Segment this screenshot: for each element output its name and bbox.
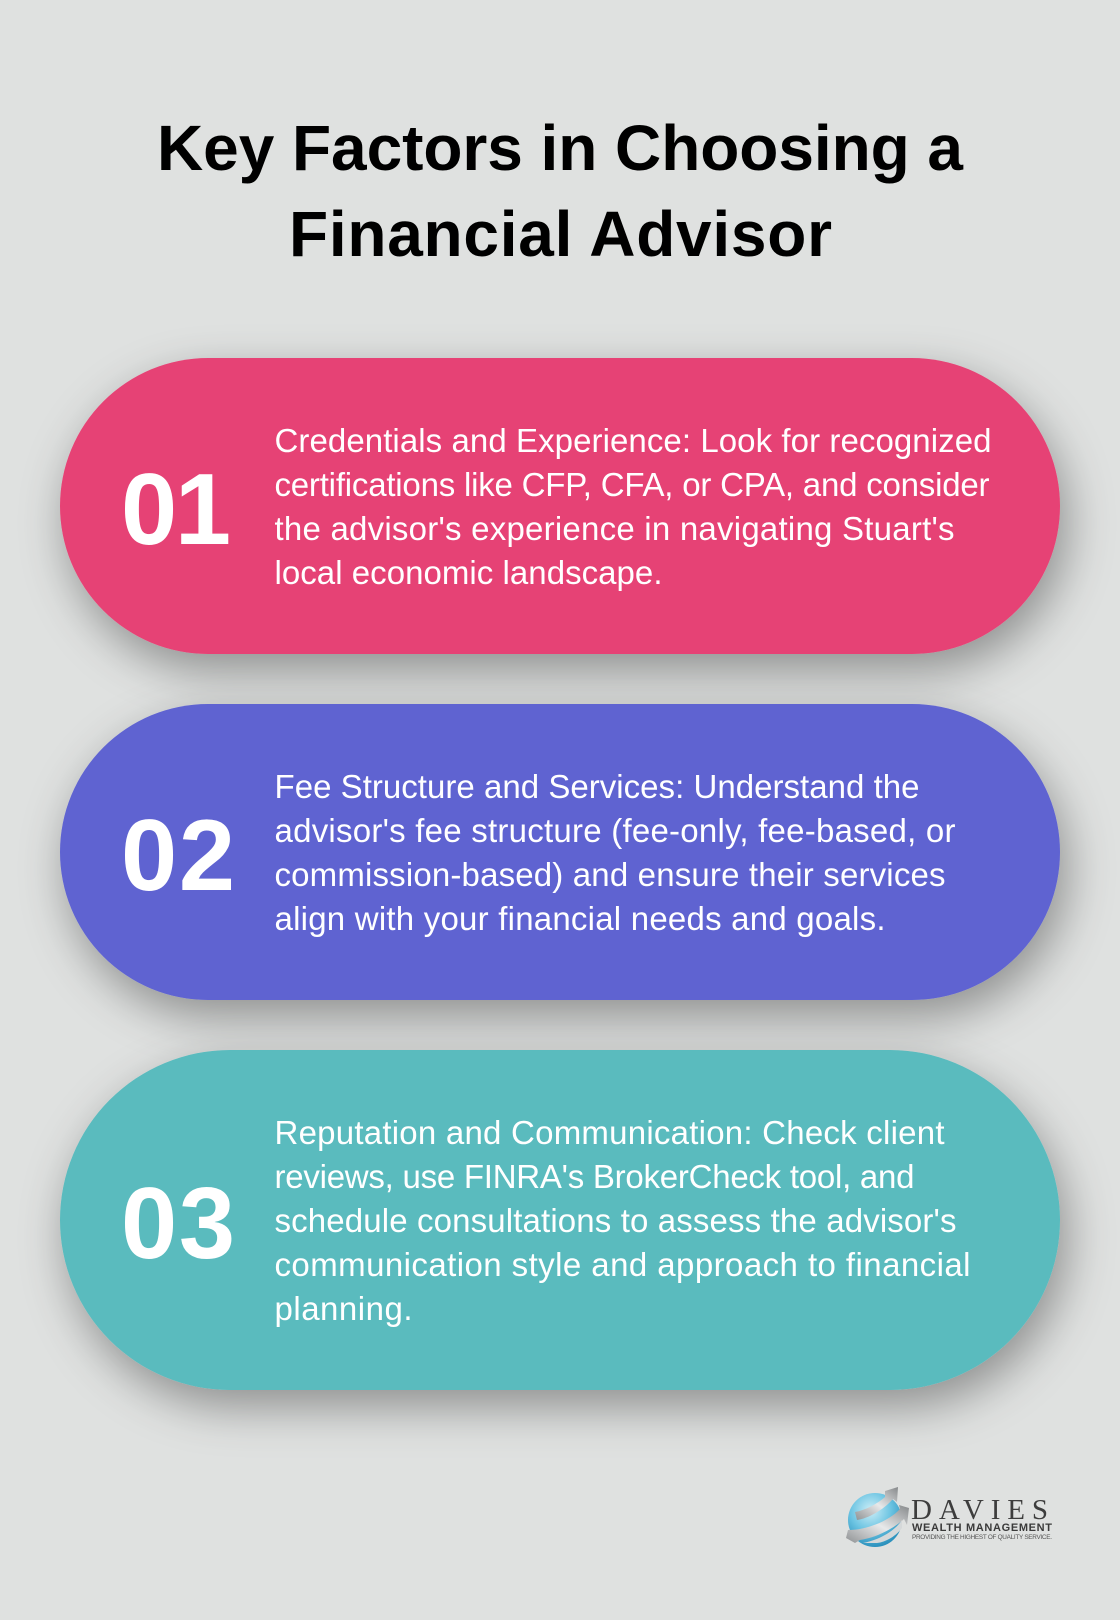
description text: Reputation and Communication: Check client	[274, 1114, 944, 1151]
description text: Credentials and Experience: Look for recognized	[274, 422, 992, 459]
teal pill background	[60, 1050, 1060, 1390]
panel: fee structure and services	[60, 704, 1060, 1000]
panel: credentials and experience	[60, 358, 1060, 654]
description text	[274, 422, 992, 591]
icon: globe with arrows	[846, 1487, 909, 1547]
pink pill background	[60, 358, 1060, 654]
description text	[274, 768, 956, 937]
panel: reputation and communication	[60, 1050, 1060, 1390]
description text: reviews, use FINRA's BrokerCheck tool, and	[274, 1158, 914, 1195]
description text	[274, 1114, 970, 1327]
description text: the advisor's experience in navigating Stuart's	[274, 510, 954, 547]
title: Financial Advisor	[289, 198, 832, 270]
description text: Fee Structure and Services: Understand the	[274, 768, 920, 805]
number 03: 03	[121, 1168, 235, 1280]
description text: planning.	[274, 1290, 412, 1327]
description text: align with your financial needs and goals.	[274, 900, 886, 937]
wordmark: DAVIES	[911, 1494, 1048, 1526]
description text: commission-based) and ensure their services	[274, 856, 946, 893]
description text: certifications like CFP, CFA, or CPA, and consider	[274, 466, 990, 503]
title	[157, 112, 963, 270]
description text: communication style and approach to financial	[274, 1246, 970, 1283]
description text: local economic landscape.	[274, 554, 662, 591]
description text: schedule consultations to assess the advisor's	[274, 1202, 956, 1239]
title: Key Factors in Choosing a	[157, 112, 963, 184]
number 02: 02	[121, 800, 235, 912]
logo: Davies Wealth Management	[846, 1487, 1052, 1547]
number 01: 01	[121, 454, 231, 566]
tagline: PROVIDING THE HIGHEST OF QUALITY SERVICE.	[912, 1534, 1052, 1541]
description text: advisor's fee structure (fee-only, fee-based, or	[274, 812, 956, 849]
purple pill background	[60, 704, 1060, 1000]
wordmark subtitle: WEALTH MANAGEMENT	[912, 1522, 1052, 1534]
